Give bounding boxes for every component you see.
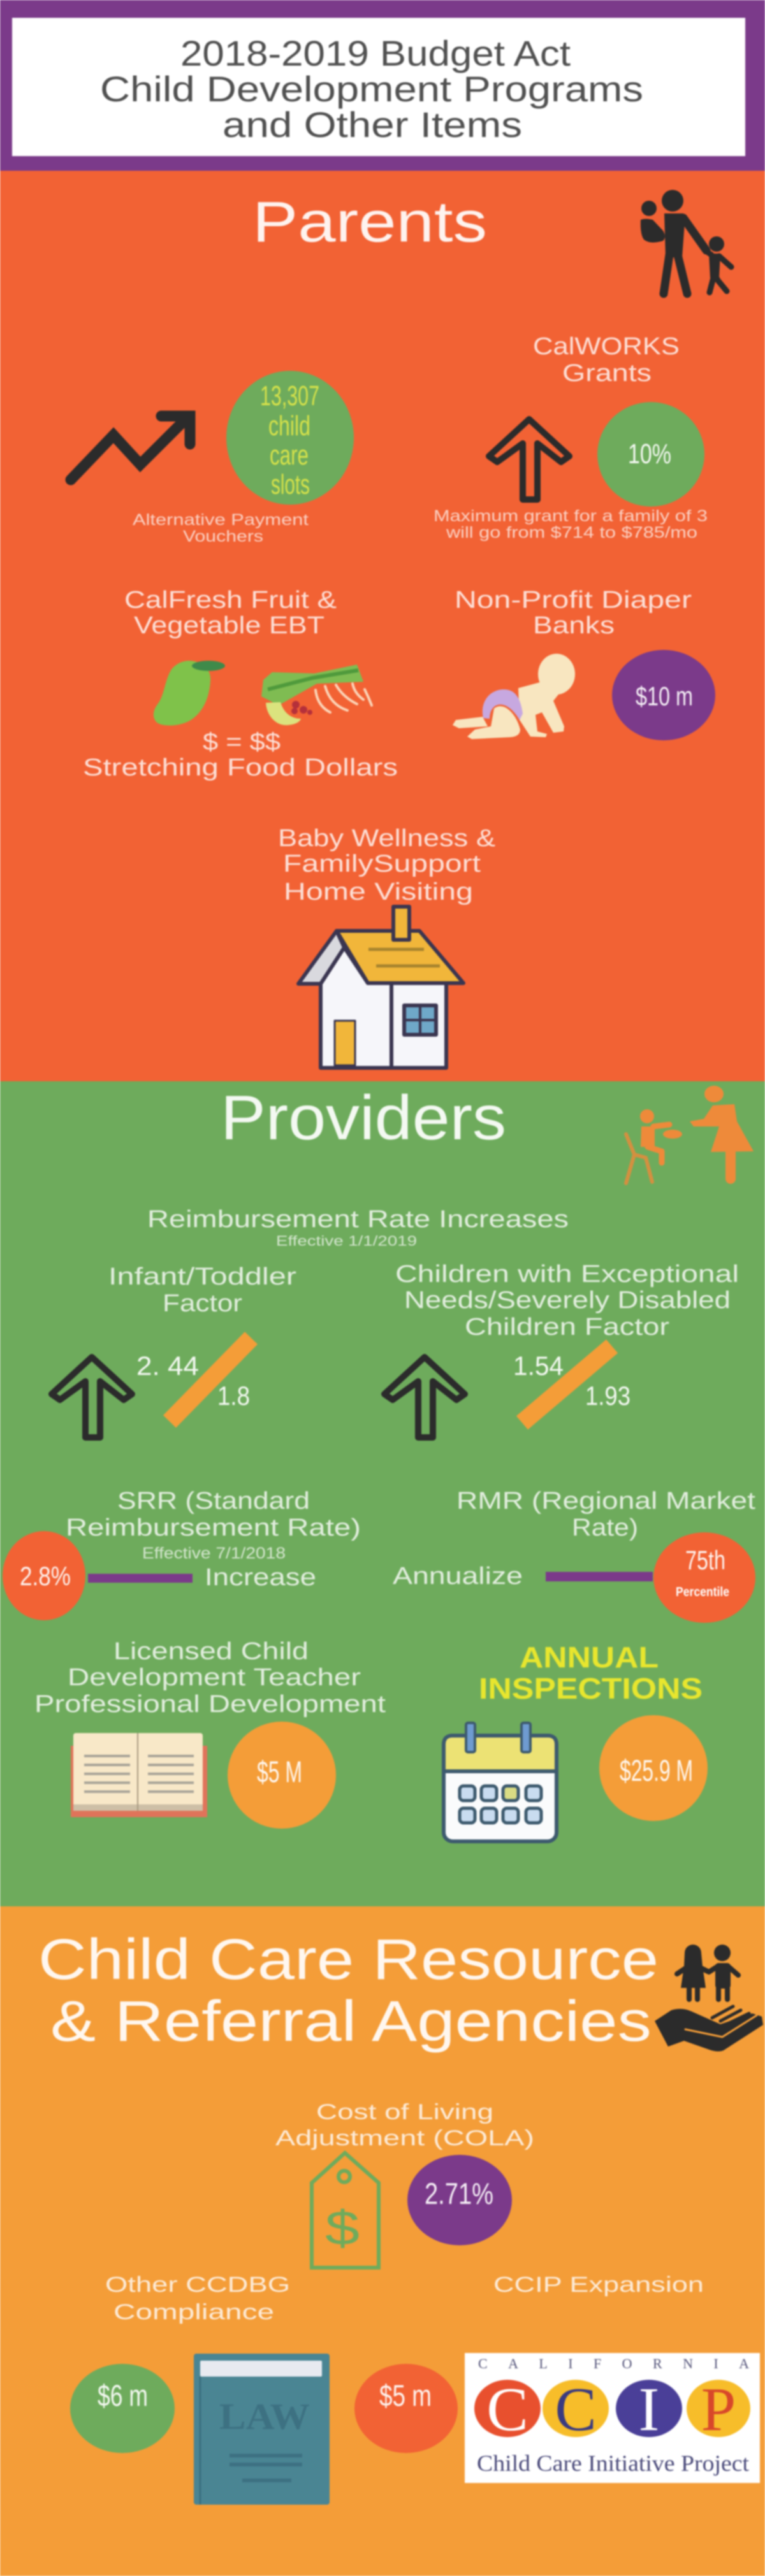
heading: diaper banks: Banks bbox=[533, 612, 615, 639]
circle: 5 million bbox=[354, 2364, 458, 2453]
icon: law book bbox=[194, 2354, 330, 2505]
heading: child care resource and referral agencies: Child Care Resource bbox=[38, 1928, 659, 1992]
heading: infant toddler bbox=[108, 1263, 296, 1317]
slash: old and new value bbox=[170, 1338, 251, 1421]
heading: ccip expansion: CCIP Expansion bbox=[493, 2273, 704, 2297]
icon: up arrow bbox=[489, 419, 569, 500]
circle: 2.8 percent: 2.8% bbox=[20, 1561, 71, 1591]
circle: 2.71 percent: 2.71% bbox=[425, 2177, 493, 2210]
block: alternative payment vouchers bbox=[71, 371, 354, 545]
circle: 10 million: $10 m bbox=[636, 681, 693, 711]
label: increase: Increase bbox=[205, 1564, 316, 1591]
panel: parents bbox=[0, 171, 765, 1081]
circle: 6 million: $6 m bbox=[98, 2378, 148, 2412]
icon: price tag bbox=[312, 2153, 379, 2268]
block: standard reimbursement rate bbox=[3, 1488, 361, 1620]
heading: calfresh: Vegetable EBT bbox=[134, 612, 324, 639]
heading: teacher professional development bbox=[34, 1638, 386, 1718]
title bbox=[100, 33, 643, 145]
block: cola bbox=[275, 2100, 534, 2268]
title: and Other Items bbox=[222, 104, 522, 145]
slash: old and new value bbox=[522, 1346, 612, 1423]
heading: teacher professional development: Licensed Child bbox=[113, 1638, 309, 1665]
circle: child care slots: slots bbox=[271, 469, 310, 500]
icon: caregiver feeding child bbox=[626, 1086, 754, 1183]
block: infant toddler factor bbox=[52, 1263, 296, 1437]
panel: providers bbox=[0, 1081, 765, 1906]
circle: 10 million bbox=[612, 650, 715, 740]
heading: infant toddler: Factor bbox=[163, 1290, 242, 1317]
circle: 75th percentile bbox=[653, 1532, 755, 1623]
heading: providers: Providers bbox=[221, 1083, 506, 1153]
heading: exceptional needs: Needs/Severely Disabled bbox=[404, 1287, 731, 1314]
icon: crawling baby bbox=[453, 654, 575, 739]
circle: 5 million: $5 M bbox=[257, 1755, 302, 1788]
circle: 25.9 million: $25.9 M bbox=[620, 1753, 693, 1787]
heading: calfresh: CalFresh Fruit & bbox=[124, 587, 337, 614]
heading: baby wellness: Home Visiting bbox=[284, 879, 473, 905]
block: diaper banks bbox=[453, 587, 715, 740]
block: calworks grants bbox=[433, 333, 708, 542]
title: Child Development Programs bbox=[100, 69, 643, 109]
icon: rising arrow bbox=[71, 416, 190, 480]
icon: calendar bbox=[444, 1723, 557, 1841]
heading: teacher professional development: Development Teacher bbox=[68, 1664, 361, 1691]
icon: house bbox=[298, 907, 463, 1068]
heading: exceptional needs: Children Factor bbox=[465, 1314, 669, 1341]
block: exceptional needs factor bbox=[384, 1261, 739, 1437]
caption: alternative payment vouchers bbox=[133, 511, 309, 545]
heading: calworks bbox=[533, 333, 680, 387]
heading: baby wellness: FamilySupport bbox=[283, 851, 481, 877]
logo: california child care initiative project: I bbox=[639, 2375, 659, 2444]
caption: alternative payment vouchers: Vouchers bbox=[183, 528, 263, 545]
circle: child care slots: child bbox=[268, 410, 310, 442]
heading: parents: Parents bbox=[252, 191, 487, 254]
logo: california child care initiative project: P bbox=[701, 2375, 736, 2444]
heading: infant toddler: Infant/Toddler bbox=[108, 1263, 296, 1290]
block: calfresh bbox=[83, 587, 398, 781]
icon: law book: LAW bbox=[219, 2396, 310, 2437]
text: stretching food dollars: $ = $$ bbox=[203, 729, 280, 756]
heading: reimbursement rate increases: Reimbursement Rate Increases bbox=[147, 1206, 569, 1233]
heading: rmr: Rate) bbox=[572, 1515, 638, 1541]
heading: other ccdbg compliance: Compliance bbox=[113, 2300, 274, 2324]
connector line bbox=[88, 1574, 193, 1583]
block: annual inspections bbox=[444, 1641, 708, 1841]
heading: srr: Effective 7/1/2018 bbox=[142, 1544, 286, 1562]
icon: parent with children bbox=[641, 190, 731, 294]
text: stretching food dollars bbox=[83, 729, 398, 781]
circle: child care slots bbox=[226, 371, 354, 505]
circle: 75th percentile: Percentile bbox=[676, 1585, 729, 1599]
heading: diaper banks: Non-Profit Diaper bbox=[455, 587, 692, 614]
logo: california child care initiative project: C bbox=[486, 2375, 528, 2444]
heading: reimbursement rate increases bbox=[147, 1206, 569, 1249]
circle: 10 percent bbox=[597, 402, 704, 507]
circle: 25.9 million bbox=[599, 1715, 708, 1821]
heading: teacher professional development: Professional Development bbox=[34, 1691, 386, 1718]
heading: exceptional needs: Children with Exceptional bbox=[395, 1261, 739, 1288]
heading: baby wellness bbox=[278, 825, 495, 905]
logo: california child care initiative project: Child Care Initiative Project bbox=[477, 2450, 749, 2476]
panel: child care resource and referral agencies bbox=[0, 1906, 765, 2576]
circle: 5 million: $5 m bbox=[379, 2378, 432, 2412]
heading: diaper banks bbox=[455, 587, 692, 639]
heading: calfresh bbox=[124, 587, 337, 639]
circle: child care slots: 13,307 bbox=[260, 380, 319, 412]
icon: open book bbox=[71, 1733, 207, 1817]
circle: 6 million bbox=[70, 2364, 175, 2453]
heading: other ccdbg compliance bbox=[105, 2273, 290, 2324]
heading: baby wellness: Baby Wellness & bbox=[278, 825, 495, 852]
block: baby wellness bbox=[278, 825, 495, 1068]
values: infant toddler bbox=[136, 1351, 250, 1411]
panel: header bbox=[0, 0, 765, 171]
heading: cola: Cost of Living bbox=[316, 2100, 493, 2124]
values: exceptional needs bbox=[513, 1351, 630, 1411]
caption: maximum grant: will go from $714 to $785/mo bbox=[446, 524, 697, 542]
icon: up arrow bbox=[52, 1357, 132, 1437]
heading: annual inspections bbox=[479, 1641, 703, 1705]
heading: rmr: RMR (Regional Market bbox=[456, 1488, 756, 1515]
heading: rmr bbox=[456, 1488, 756, 1541]
values: exceptional needs: 1.54 bbox=[513, 1351, 564, 1381]
heading: reimbursement rate increases: Effective 1/1/2019 bbox=[276, 1233, 417, 1249]
heading: srr bbox=[66, 1488, 361, 1562]
circle: 2.71 percent bbox=[407, 2155, 512, 2245]
heading: other ccdbg compliance: Other CCDBG bbox=[105, 2273, 290, 2297]
heading: cola bbox=[275, 2100, 534, 2150]
label: annualize: Annualize bbox=[393, 1563, 523, 1590]
circle: child care slots: care bbox=[270, 440, 309, 471]
icon: children in a caring hand bbox=[655, 1945, 763, 2052]
icon: price tag: $ bbox=[325, 2201, 360, 2256]
logo: california child care initiative project bbox=[465, 2353, 760, 2483]
icon: up arrow bbox=[384, 1357, 465, 1437]
icon: mango bbox=[154, 661, 225, 726]
heading: calworks: CalWORKS bbox=[533, 333, 680, 360]
block: other ccdbg compliance bbox=[70, 2273, 330, 2505]
icon: vegetables bbox=[261, 665, 372, 725]
circle: 10 percent: 10% bbox=[628, 438, 671, 470]
caption: alternative payment vouchers: Alternative Payment bbox=[133, 511, 309, 529]
block: teacher professional development bbox=[34, 1638, 386, 1829]
heading: srr: SRR (Standard bbox=[117, 1488, 310, 1515]
logo: california child care initiative project: CALIFORNIA bbox=[478, 2356, 749, 2371]
heading: calworks: Grants bbox=[562, 360, 652, 387]
circle: 75th percentile: 75th bbox=[685, 1545, 725, 1575]
circle: 5 million bbox=[228, 1722, 336, 1829]
caption: maximum grant bbox=[433, 507, 708, 542]
connector line bbox=[546, 1572, 653, 1581]
text: stretching food dollars: Stretching Food Dollars bbox=[83, 754, 398, 781]
heading: child care resource and referral agencies bbox=[38, 1928, 659, 2054]
block: ccip expansion bbox=[354, 2273, 760, 2483]
heading: annual inspections: ANNUAL bbox=[520, 1641, 659, 1674]
values: exceptional needs: 1.93 bbox=[585, 1381, 630, 1411]
heading: srr: Reimbursement Rate) bbox=[66, 1515, 361, 1541]
block: regional market rate bbox=[393, 1488, 756, 1623]
heading: exceptional needs bbox=[395, 1261, 739, 1341]
circle: 2.8 percent bbox=[3, 1531, 85, 1620]
heading: child care resource and referral agencies: & Referral Agencies bbox=[50, 1990, 652, 2054]
heading: annual inspections: INSPECTIONS bbox=[479, 1672, 703, 1705]
heading: cola: Adjustment (COLA) bbox=[275, 2126, 534, 2150]
values: infant toddler: 2. 44 bbox=[136, 1351, 199, 1381]
title: 2018-2019 Budget Act bbox=[180, 33, 571, 73]
caption: maximum grant: Maximum grant for a family of 3 bbox=[433, 507, 708, 525]
logo: california child care initiative project: C bbox=[555, 2375, 597, 2444]
values: infant toddler: 1.8 bbox=[217, 1381, 250, 1411]
